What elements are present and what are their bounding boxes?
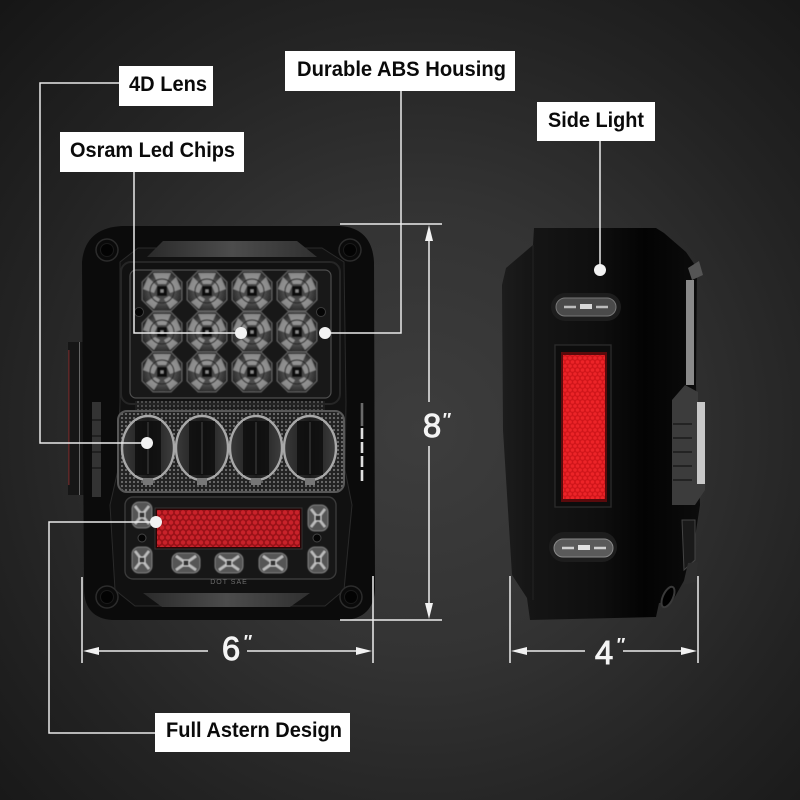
dimension: 6 inch width — [82, 577, 373, 667]
left side tab with red edge — [68, 342, 84, 495]
label: durable abs housing: Durable ABS Housing — [297, 58, 506, 81]
dimension: 8 inch height: 8 — [423, 407, 441, 444]
side body — [502, 228, 700, 620]
label: full astern design — [155, 713, 350, 752]
side reflector — [555, 345, 611, 507]
front housing — [82, 226, 375, 620]
housing inner panel — [110, 248, 352, 606]
lower lamp panel — [125, 497, 336, 586]
mesh strip above lenses — [135, 401, 325, 410]
leader: osram led chips — [134, 172, 247, 339]
dimension: 8 inch height — [340, 224, 452, 620]
led chips grid — [142, 271, 317, 392]
corner and bottom small leds — [132, 502, 328, 573]
top trapezoid highlight — [147, 241, 317, 257]
label: side light — [537, 102, 655, 141]
label: durable abs housing — [285, 51, 515, 91]
ridged connector — [672, 385, 705, 505]
side light bottom — [549, 532, 617, 562]
label: osram led chips: Osram Led Chips — [70, 139, 235, 162]
leader: 4D lens — [40, 83, 153, 449]
bottom bracket — [659, 520, 698, 609]
dimension: 4 inch depth: 4 — [595, 634, 613, 671]
side view tail light — [502, 228, 705, 620]
body seam — [532, 245, 534, 600]
top clip — [688, 261, 703, 280]
dimension: 6 inch width: ″ — [243, 632, 253, 652]
leader: full astern design — [49, 516, 162, 733]
oval lens panel — [118, 411, 344, 492]
front view tail light — [68, 226, 375, 620]
leader: durable abs housing — [319, 91, 401, 339]
right edge highlights — [361, 403, 363, 482]
silver strip — [686, 280, 694, 385]
red reflector — [155, 508, 302, 549]
label: osram led chips — [60, 132, 244, 172]
label: side light: Side Light — [548, 109, 644, 132]
left ridged strip — [92, 402, 101, 497]
dimension: 8 inch height: ″ — [442, 410, 452, 430]
label: 4D lens: 4D Lens — [129, 73, 207, 96]
mounting screws — [96, 239, 362, 608]
leader: side light — [594, 141, 606, 276]
dimension: 6 inch width: 6 — [222, 630, 240, 667]
side light top — [551, 293, 621, 321]
dimension: 4 inch depth — [510, 576, 698, 671]
dimension: 4 inch depth: ″ — [616, 635, 626, 655]
label: full astern design: Full Astern Design — [166, 719, 342, 742]
label: 4D lens — [119, 66, 213, 106]
dot text: DOT SAE — [210, 579, 248, 586]
bottom trapezoid highlight — [143, 593, 310, 607]
led lens panel — [121, 262, 340, 404]
